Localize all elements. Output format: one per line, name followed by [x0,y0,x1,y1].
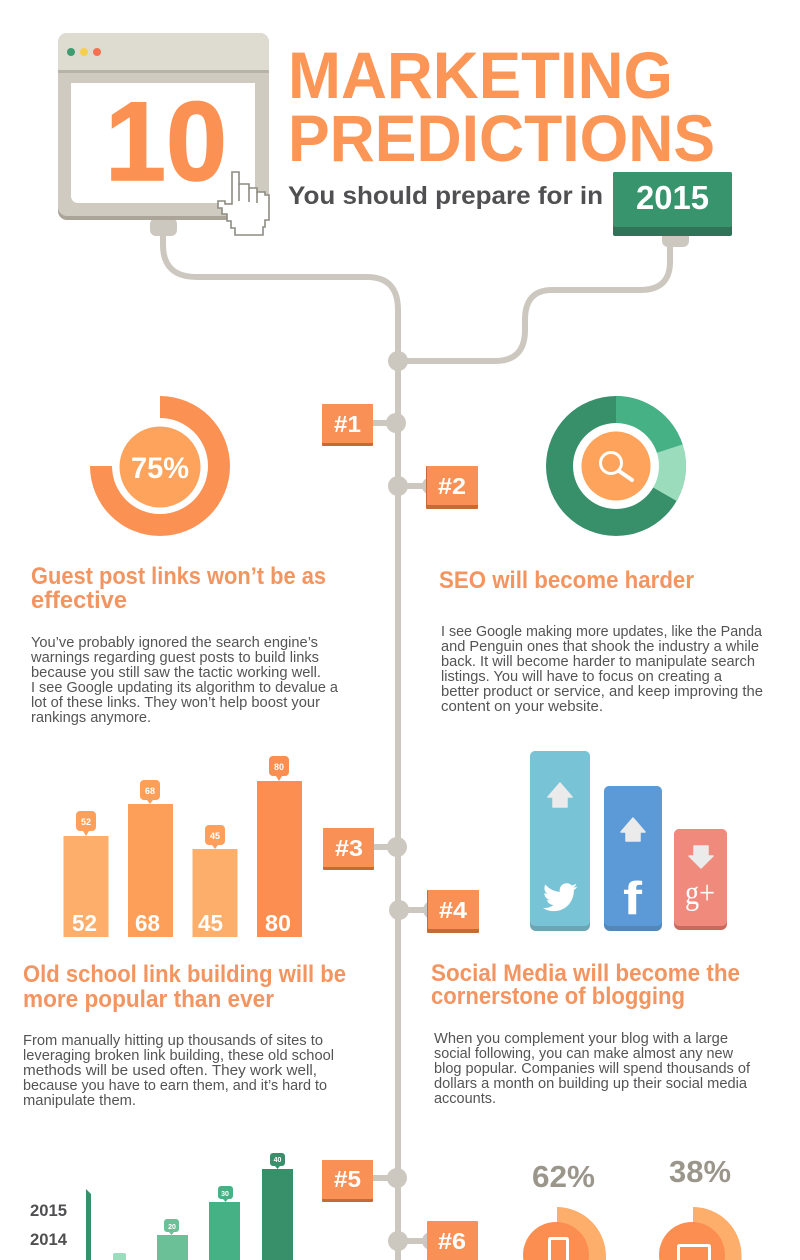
bar: twitter [530,751,590,931]
tag #3: #3 [335,835,363,861]
chart: social media bars [530,751,727,931]
bar: facebook: f [623,872,643,924]
bar chart: orange [64,756,302,937]
tag #2 [388,466,478,509]
tag #4: #4 [439,897,467,923]
bar chart: orange: 52 [81,817,91,827]
text: old school: methods will be used often. They work well, [23,1063,317,1079]
tag #6: #6 [438,1228,466,1254]
heading: old school: more popular than ever [23,986,274,1013]
subtitle: You should prepare for in [288,182,603,210]
text: social media: When you complement your blog with a large [434,1031,728,1047]
bar chart: orange: 52 [72,910,97,936]
heading: social media [431,960,740,1010]
text: SEO: better product or service, and keep improving the [441,684,763,700]
heading: guest post: effective [31,587,127,614]
tag #3 [323,828,407,870]
heading: old school: Old school link building will be [23,961,346,988]
chart: green year bars: 2015 [30,1201,67,1220]
chart: SEO donut [546,396,686,536]
icon: monitor [678,1246,710,1260]
tag #4 [389,890,479,933]
timeline connector [150,218,689,1260]
text: guest post: I see Google updating its algorithm to devalue a [31,680,339,696]
text: SEO: back. It will become harder to manipulate search [441,654,755,670]
icon: hand cursor [218,172,269,235]
text: SEO: I see Google making more updates, like the Panda [441,624,763,640]
year badge: 2015 [636,179,709,216]
browser window with 10 [58,33,269,220]
text: guest post: because you still saw the tactic working well. [31,665,321,681]
heading: guest post: Guest post links won’t be as [31,563,326,590]
bar chart: orange: 68 [135,910,160,936]
chart: 62% mobile: 62% [532,1159,595,1194]
text: social media: social following, you can make almost any new [434,1046,734,1062]
text: social media: blog popular. Companies will spend thousands of [434,1061,751,1077]
text: social media [434,1031,751,1107]
text: SEO: content on your website. [441,699,603,715]
text: social media: accounts. [434,1091,496,1107]
bar: google plus [674,829,727,930]
bar chart: orange: 80 [274,762,284,772]
chart: green year bars: 20 [168,1224,176,1231]
text: old school: manipulate them. [23,1093,136,1109]
chart: 75% donut [90,396,230,536]
heading: social media: Social Media will become the [431,960,740,987]
bar chart: orange: 45 [198,910,223,936]
title [288,38,715,175]
year badge [613,172,732,236]
bar chart: orange: 68 [145,786,155,796]
title: MARKETING [288,38,673,112]
tag #5 [322,1160,407,1202]
heading: SEO: SEO will become harder [439,567,694,594]
text: SEO: listings. You will have to focus on creating a [441,669,723,685]
chart: green year bars: 40 [274,1157,281,1164]
tag #1 [322,404,406,446]
icon: phone [550,1238,568,1260]
text: guest post: rankings anymore. [31,710,151,726]
chart: green year bars: 2014 [30,1230,68,1249]
chart: 38% desktop [659,1154,742,1260]
text: old school: because you have to earn them, and it’s hard to [23,1078,327,1094]
tag #5: #5 [334,1166,361,1192]
text: social media: dollars a month on building up their social media [434,1076,748,1092]
tag #1: #1 [334,411,361,437]
chart: green year bars: 30 [221,1191,229,1198]
text: guest post: You’ve probably ignored the search engine’s [31,635,318,651]
heading: old school [23,961,346,1013]
tag #6 [388,1221,478,1260]
text: old school: From manually hitting up thousands of sites to [23,1033,323,1049]
chart: 75% donut: 75% [131,452,189,485]
icon: magnifier [600,452,632,480]
title: PREDICTIONS [288,101,715,175]
bar: google plus: g+ [685,875,715,912]
text: guest post: warnings regarding guest posts to build links [30,650,319,666]
text: old school [23,1033,334,1109]
chart: 62% mobile [523,1159,606,1260]
text: old school: leveraging broken link building, these old school [23,1048,334,1064]
chart: green year bars [30,1153,293,1260]
bar chart: orange: 80 [265,910,291,936]
text: guest post [30,635,339,726]
bar chart: orange: 45 [210,831,220,841]
text: guest post: lot of these links. They won’t help boost your [31,695,320,711]
tag #2: #2 [438,473,466,499]
text: SEO: and Penguin ones that shook the industry a while [441,639,759,655]
text: SEO [441,624,763,715]
number 10: 10 [105,79,227,204]
heading: social media: cornerstone of blogging [431,983,685,1010]
chart: 38% desktop: 38% [669,1154,731,1189]
heading: guest post [31,563,326,614]
bar: facebook [604,786,662,931]
